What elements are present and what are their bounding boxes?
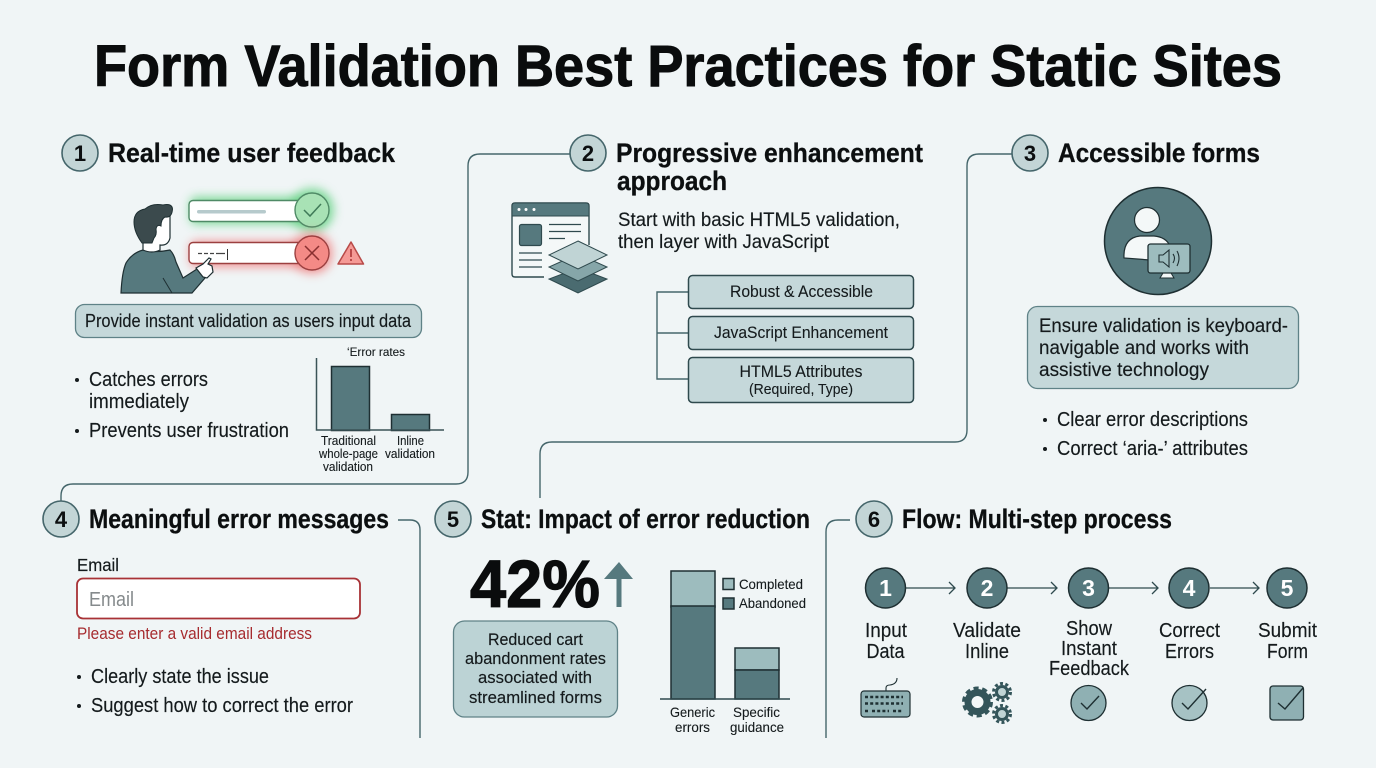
connector: section 4 to bottom: [398, 520, 420, 738]
bar chart: error rates: Inline: [397, 434, 424, 448]
stacked bar chart: [660, 571, 806, 735]
badge 1: 1: [74, 141, 86, 166]
step 5: submit form: [1258, 568, 1317, 720]
stacked bar chart: errors: [675, 719, 710, 735]
bar chart: error rates: whole-page: [318, 447, 378, 461]
badge 5: [435, 501, 471, 537]
step 1: input data: [861, 568, 910, 717]
step 4: correct errors: [1159, 568, 1220, 720]
heading 1: Real-time user feedback: [108, 138, 396, 168]
icon: checkbox: [1270, 686, 1304, 720]
stacked bar chart: Abandoned: [739, 595, 806, 611]
callout: keyboard navigable: Ensure validation is keyboard-: [1039, 315, 1288, 337]
callout: reduced cart abandonment: streamlined forms: [469, 688, 602, 707]
text: approach description: Start with basic HTML5 validation,: [618, 209, 900, 231]
step 5: submit form: Form: [1267, 641, 1308, 663]
stacked bar chart: guidance: [730, 719, 784, 735]
callout: reduced cart abandonment: associated with: [478, 668, 592, 687]
bullet list: Prevents user frustration: [89, 420, 289, 442]
callout: keyboard navigable: navigable and works with: [1039, 337, 1249, 359]
callout: instant validation: [76, 304, 422, 338]
bullet list: [77, 666, 353, 717]
heading 5: Stat: Impact of error reduction: [481, 504, 810, 534]
step 4: correct errors: Correct: [1159, 620, 1220, 642]
step 3: show instant feedback: [1049, 568, 1130, 720]
layer: html5 attributes: (Required, Type): [749, 382, 853, 398]
icon: check circle: [1172, 686, 1207, 720]
heading 3: Accessible forms: [1058, 138, 1260, 168]
email input: Email: [89, 589, 134, 611]
panel: progressive enhancement: [512, 135, 923, 402]
panel: accessible forms: [1012, 135, 1298, 460]
badge 4: [43, 501, 79, 537]
icon: up arrow: [604, 562, 633, 607]
badge 2: 2: [582, 141, 594, 166]
stacked bar chart: Generic: [670, 704, 715, 720]
bar chart: error rates: Traditional: [321, 434, 376, 448]
callout: keyboard navigable: [1028, 306, 1298, 388]
layer: html5 attributes: [688, 358, 914, 402]
bullet list: Catches errors: [89, 369, 208, 391]
heading 2: [616, 138, 923, 196]
bullet list: [75, 369, 289, 442]
step 1: input data: 1: [879, 575, 892, 601]
connector: section 6 to bottom: [826, 520, 850, 738]
step 2: validate inline: [953, 568, 1021, 722]
stacked bar chart: Specific: [733, 704, 780, 720]
step 3: show instant feedback: Feedback: [1049, 658, 1130, 680]
step 1: input data: Data: [866, 641, 905, 663]
flow arrows: [905, 582, 1259, 594]
step 2: validate inline: Validate: [953, 620, 1021, 642]
layer: html5 attributes: HTML5 Attributes: [740, 363, 862, 381]
text: approach description: [618, 209, 900, 253]
step 3: show instant feedback: Show: [1066, 618, 1113, 640]
bar chart: error rates: validation: [323, 460, 373, 474]
bullet list: Clearly state the issue: [91, 666, 269, 688]
text: approach description: then layer with JavaScript: [618, 231, 830, 253]
icon: warning triangle: [338, 242, 364, 264]
panel: meaningful error messages: [43, 501, 389, 717]
panel: multi-step flow: [856, 501, 1317, 722]
badge 6: [856, 501, 892, 537]
bullet list: Suggest how to correct the error: [91, 695, 353, 717]
tree connector: [657, 292, 688, 379]
heading 6: Flow: Multi-step process: [902, 504, 1172, 534]
bar chart: error rates: [316, 345, 444, 474]
step 5: submit form: 5: [1281, 575, 1294, 601]
badge 1: [62, 135, 98, 171]
panel: impact of error reduction: [435, 501, 810, 735]
callout: keyboard navigable: assistive technology: [1039, 359, 1209, 381]
bullet list: immediately: [89, 391, 189, 413]
badge 2: [570, 135, 606, 171]
layer: javascript enhancement: [688, 316, 914, 350]
step 1: input data: Input: [865, 620, 907, 642]
illustration: invalid field: [189, 232, 333, 274]
heading 4: Meaningful error messages: [89, 504, 389, 534]
icon: keyboard: [861, 678, 910, 717]
icon: user with screen reader: [1104, 188, 1212, 294]
icon: browser with layers: [512, 203, 607, 293]
step 2: validate inline: 2: [981, 575, 993, 601]
error message: Please enter a valid email address: [77, 625, 312, 643]
panel: real-time user feedback: [62, 135, 444, 474]
layer: javascript enhancement: JavaScript Enhancement: [714, 324, 888, 342]
badge 3: [1012, 135, 1048, 171]
icon: gears: [964, 684, 1010, 722]
illustration: valid field: [189, 188, 334, 232]
icon: check circle: [1071, 686, 1106, 720]
bar chart: error rates: ‘Error rates: [347, 345, 405, 359]
connector: section 5 to section 3: [540, 154, 1012, 498]
step 4: correct errors: Errors: [1165, 641, 1214, 663]
bullet list: Correct ‘aria-’ attributes: [1057, 438, 1248, 460]
callout: instant validation: Provide instant validation as users input data: [85, 311, 412, 331]
callout: reduced cart abandonment: Reduced cart: [488, 630, 583, 649]
layer: robust and accessible: Robust & Accessible: [730, 283, 873, 301]
layer: robust and accessible: [688, 276, 914, 308]
badge 5: 5: [447, 507, 459, 532]
form label: Email: [77, 555, 119, 575]
callout: reduced cart abandonment: abandonment rates: [465, 649, 606, 668]
email input: [77, 578, 360, 618]
stacked bar chart: Completed: [739, 576, 803, 592]
heading 2: approach: [617, 166, 727, 196]
badge 3: 3: [1024, 141, 1036, 166]
step 3: show instant feedback: Instant: [1061, 638, 1117, 660]
step 2: validate inline: Inline: [965, 641, 1009, 663]
callout: reduced cart abandonment: [454, 621, 618, 717]
bullet list: Clear error descriptions: [1057, 409, 1248, 431]
badge 4: 4: [55, 507, 68, 532]
connector: section 4 to section 2: [61, 154, 570, 502]
bar chart: error rates: validation: [385, 447, 435, 461]
stat: 42%: 42%: [470, 547, 600, 622]
badge 6: 6: [868, 507, 880, 532]
illustration: person pointing: [121, 204, 213, 293]
step 3: show instant feedback: 3: [1082, 575, 1095, 601]
title: Form Validation Best Practices for Static Sites: [94, 34, 1282, 99]
step 5: submit form: Submit: [1258, 620, 1317, 642]
heading 2: Progressive enhancement: [616, 138, 923, 168]
step 4: correct errors: 4: [1183, 575, 1196, 601]
bullet list: [1043, 409, 1248, 460]
